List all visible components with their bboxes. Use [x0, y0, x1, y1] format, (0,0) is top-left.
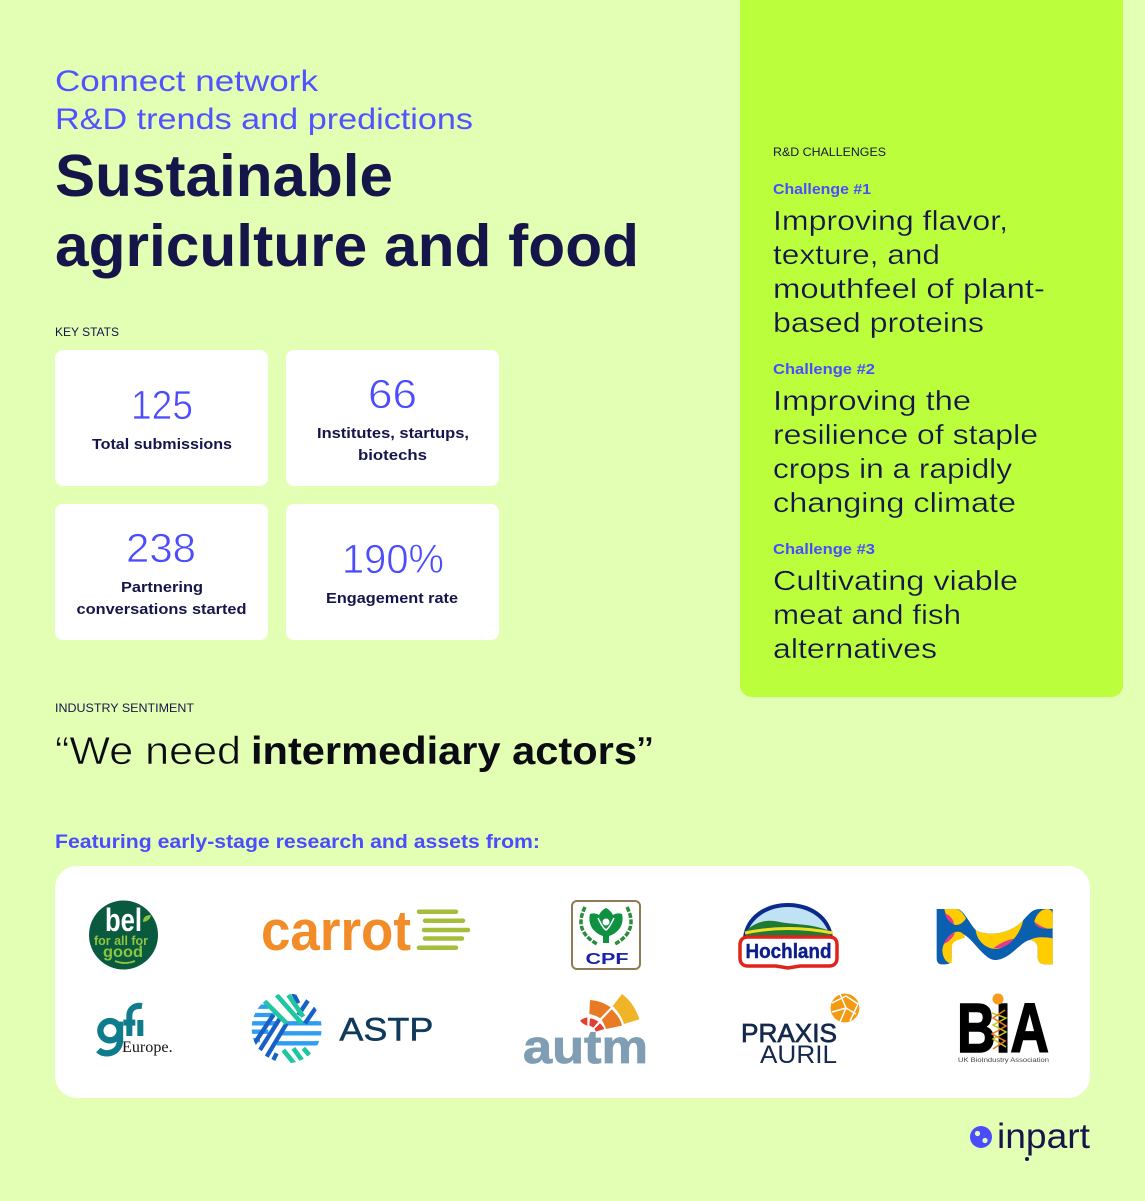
challenge 3: alternatives: [773, 633, 937, 664]
logo: inpart: inpart: [997, 1117, 1090, 1156]
title: Sustainable: [55, 143, 393, 209]
logo: CPF: [572, 901, 640, 969]
challenge 3: Cultivating viable: [773, 565, 1018, 596]
industry sentiment label: INDUSTRY SENTIMENT: [55, 701, 195, 715]
stat card: conversations: conversations started: [76, 601, 247, 618]
stat card: engagement: 190%: [342, 536, 444, 582]
eyebrow heading: [55, 65, 473, 136]
logo: Praxis Auril: PRAXIS: [741, 1020, 837, 1048]
logo: gfi Europe: Europe.: [122, 1039, 173, 1056]
challenge 2: Challenge #2: [773, 361, 875, 378]
challenge 1: texture, and: [773, 239, 940, 270]
sentiment quote: ”: [637, 730, 653, 773]
challenge 1: [773, 181, 1045, 338]
eyebrow heading: R&D trends and predictions: [55, 103, 473, 136]
inpart mark: [970, 1126, 992, 1148]
logo: BIA: BIA: [957, 989, 1049, 1067]
logo: carrot: carrot: [261, 899, 411, 963]
key stats label: KEY STATS: [55, 325, 119, 339]
logo: CPF: CPF: [586, 951, 629, 968]
challenge 1: Challenge #1: [773, 181, 871, 198]
stat card: conversations: 238: [126, 525, 196, 571]
logo: ASTP: [250, 993, 433, 1067]
featuring heading: Featuring early-stage research and assets from:: [55, 831, 540, 853]
stat card: conversations: Partnering: [121, 579, 203, 596]
challenge 1: mouthfeel of plant-: [773, 273, 1045, 304]
challenge 2: resilience of staple: [773, 419, 1038, 450]
title: agriculture and food: [55, 213, 639, 279]
sentiment quote: intermediary actors: [251, 730, 637, 773]
logo: bel: good: [103, 944, 143, 961]
challenge 1: based proteins: [773, 307, 984, 338]
logo: Praxis Auril: [741, 994, 860, 1069]
logo: bel: bel: [105, 902, 142, 938]
stat card: conversations: [55, 504, 268, 640]
stat card: institutes: Institutes, startups,: [317, 425, 469, 442]
challenge 3: Challenge #3: [773, 541, 875, 558]
panel: R&D challenges: [740, 0, 1123, 697]
logo: BIA: UK BioIndustry Association: [958, 1057, 1049, 1064]
stat card: total submissions: [55, 350, 268, 486]
title: [55, 143, 639, 279]
panel: logos: [55, 866, 1090, 1098]
logo: Hochland: [740, 903, 837, 968]
logo: M: [937, 909, 1053, 964]
challenge 1: Improving flavor,: [773, 205, 1008, 236]
stat card: engagement: [286, 504, 499, 640]
stat card: institutes: [286, 350, 499, 486]
challenge 3: meat and fish: [773, 599, 961, 630]
stat card: institutes: biotechs: [358, 447, 427, 464]
challenge 2: [773, 361, 1038, 518]
stat card: engagement: Engagement rate: [326, 590, 458, 607]
stat card: institutes: 66: [368, 371, 417, 417]
challenge 2: Improving the: [773, 385, 971, 416]
challenges label: R&D CHALLENGES: [773, 145, 886, 159]
logo: autm: autm: [523, 1020, 648, 1073]
logo: bel: for all for: [94, 934, 148, 948]
sentiment quote: [55, 730, 653, 773]
logo: gfi Europe: [98, 1006, 173, 1056]
logo: Praxis Auril: AURIL: [760, 1041, 837, 1069]
challenge 2: changing climate: [773, 487, 1016, 518]
logo: ASTP: ASTP: [339, 1011, 433, 1048]
logo: autm: [523, 994, 648, 1073]
stat card: total submissions: 125: [131, 382, 193, 428]
challenge 2: crops in a rapidly: [773, 453, 1012, 484]
logo: inpart: [970, 1117, 1090, 1161]
sentiment quote: “We need: [55, 730, 241, 773]
stat card: total submissions: Total submissions: [92, 436, 232, 453]
eyebrow heading: Connect network: [55, 65, 319, 98]
key stats cards: [55, 350, 499, 640]
logo: bel: [89, 900, 158, 970]
logo: Hochland: Hochland: [746, 941, 832, 963]
challenge 3: [773, 541, 1018, 664]
